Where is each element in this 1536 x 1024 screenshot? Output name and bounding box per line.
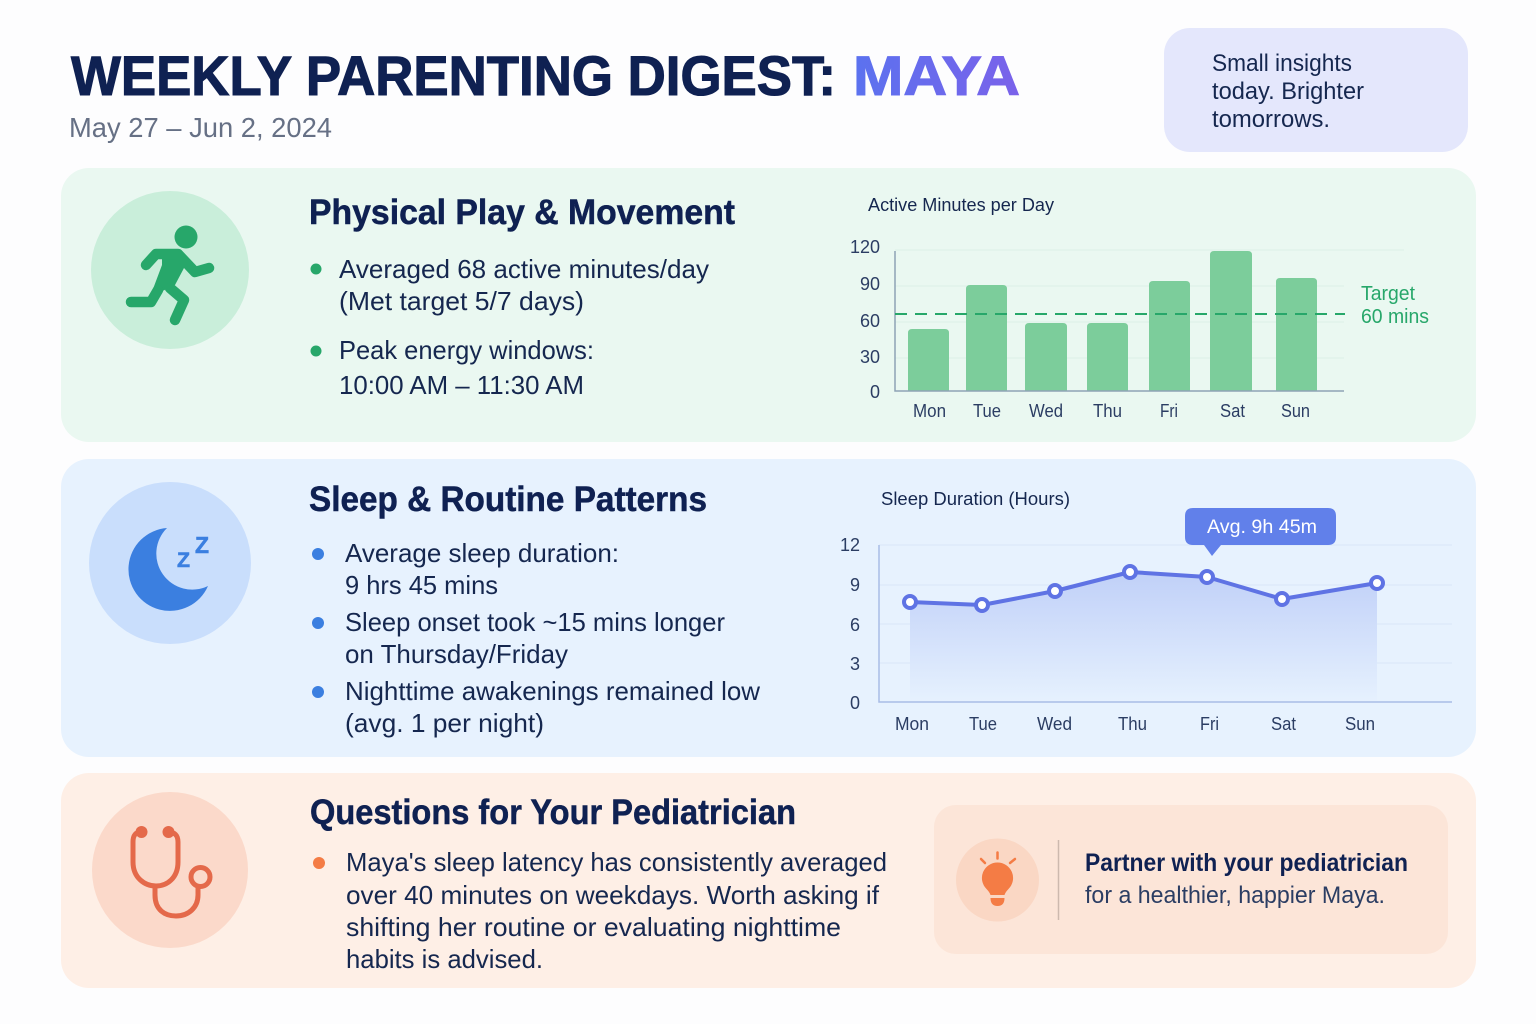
- line chart: sleep duration: Sun: [1345, 714, 1375, 734]
- target label: [1361, 283, 1429, 328]
- bar chart: active minutes per day: Active Minutes per Day: [868, 195, 1054, 215]
- bullet list: [310, 254, 709, 400]
- heading: Sleep & Routine Patterns: [309, 480, 707, 519]
- callout: tagline: Small insights: [1212, 50, 1352, 77]
- bullet list: [312, 538, 760, 738]
- line chart: sleep duration: Thu: [1118, 714, 1147, 734]
- line chart: sleep duration: Mon: [895, 714, 929, 734]
- bullet list: Nighttime awakenings remained low: [345, 676, 760, 706]
- bullet list: Average sleep duration:: [345, 538, 619, 568]
- bar chart: active minutes per day: 0: [870, 382, 880, 402]
- icon: light bulb: [956, 838, 1039, 922]
- target label: Target: [1361, 283, 1415, 305]
- heading: Physical Play & Movement: [309, 193, 735, 232]
- icon: moon with zz: Z: [195, 532, 209, 558]
- bar chart: active minutes per day: 90: [860, 274, 880, 294]
- title: MAYA: [853, 44, 1020, 107]
- bullet list: (avg. 1 per night): [345, 708, 544, 738]
- bullet list: (Met target 5/7 days): [339, 286, 584, 316]
- bar chart: active minutes per day: Thu: [1093, 401, 1122, 421]
- line chart: sleep duration: 12: [840, 535, 860, 555]
- bar chart: active minutes per day: Sun: [1281, 401, 1310, 421]
- title: WEEKLY PARENTING DIGEST:: [71, 44, 836, 107]
- target label: 60 mins: [1361, 306, 1429, 328]
- callout: tagline: today. Brighter: [1212, 78, 1364, 105]
- bar chart: active minutes per day: 30: [860, 347, 880, 367]
- bullet text: Maya's sleep latency has consistently averaged: [346, 847, 887, 877]
- bar chart: active minutes per day: Fri: [1160, 401, 1178, 421]
- callout: partner with pediatrician: Partner with your pediatrician: [1085, 849, 1408, 877]
- callout: tagline: [1164, 28, 1468, 152]
- icon: moon with zz: Z: [177, 549, 190, 572]
- panel: physical play: [61, 168, 1476, 442]
- bullet text: habits is advised.: [346, 944, 543, 974]
- line chart: sleep duration: Sleep Duration (Hours): [881, 489, 1070, 509]
- bullet list: on Thursday/Friday: [345, 639, 568, 669]
- callout: average sleep: [1185, 508, 1336, 556]
- bar chart: active minutes per day: 60: [860, 311, 880, 331]
- line chart: sleep duration: Fri: [1200, 714, 1219, 734]
- icon: moon with zz: [89, 482, 251, 644]
- bullet list: Sleep onset took ~15 mins longer: [345, 607, 725, 637]
- bullet list: Averaged 68 active minutes/day: [339, 254, 709, 284]
- bullet list: 10:00 AM – 11:30 AM: [339, 370, 584, 400]
- bullet list: Peak energy windows:: [339, 335, 594, 365]
- bullet list: 9 hrs 45 mins: [345, 570, 498, 600]
- bar chart: active minutes per day: Mon: [913, 401, 946, 421]
- line chart: sleep duration: 6: [850, 615, 860, 635]
- heading: Questions for Your Pediatrician: [310, 793, 796, 832]
- bar chart: active minutes per day: Tue: [973, 401, 1001, 421]
- line chart: sleep duration: 0: [850, 693, 860, 713]
- callout: partner with pediatrician: for a healthier, happier Maya.: [1085, 882, 1385, 909]
- bullet text: over 40 minutes on weekdays. Worth asking if: [346, 880, 880, 910]
- bar chart: active minutes per day: Wed: [1029, 401, 1063, 421]
- line chart: sleep duration: Sat: [1271, 714, 1296, 734]
- bullet text: [313, 847, 887, 974]
- icon: stethoscope: [92, 792, 248, 948]
- callout: tagline: tomorrows.: [1212, 106, 1330, 133]
- icon: running figure: [91, 191, 249, 349]
- date range: May 27 – Jun 2, 2024: [69, 112, 332, 143]
- line chart: sleep duration: [840, 489, 1452, 734]
- panel: sleep and routine: [61, 459, 1476, 757]
- callout: partner with pediatrician: [934, 805, 1448, 954]
- line chart: sleep duration: 3: [850, 654, 860, 674]
- line chart: sleep duration: Wed: [1037, 714, 1072, 734]
- line chart: sleep duration: 9: [850, 575, 860, 595]
- line chart: sleep duration: Tue: [969, 714, 997, 734]
- bar chart: active minutes per day: Sat: [1220, 401, 1245, 421]
- callout: average sleep: Avg. 9h 45m: [1207, 517, 1317, 538]
- bullet text: shifting her routine or evaluating nighttime: [346, 912, 841, 942]
- panel: pediatrician questions: [61, 773, 1476, 988]
- bar chart: active minutes per day: 120: [850, 237, 880, 257]
- bar chart: active minutes per day: [850, 195, 1429, 421]
